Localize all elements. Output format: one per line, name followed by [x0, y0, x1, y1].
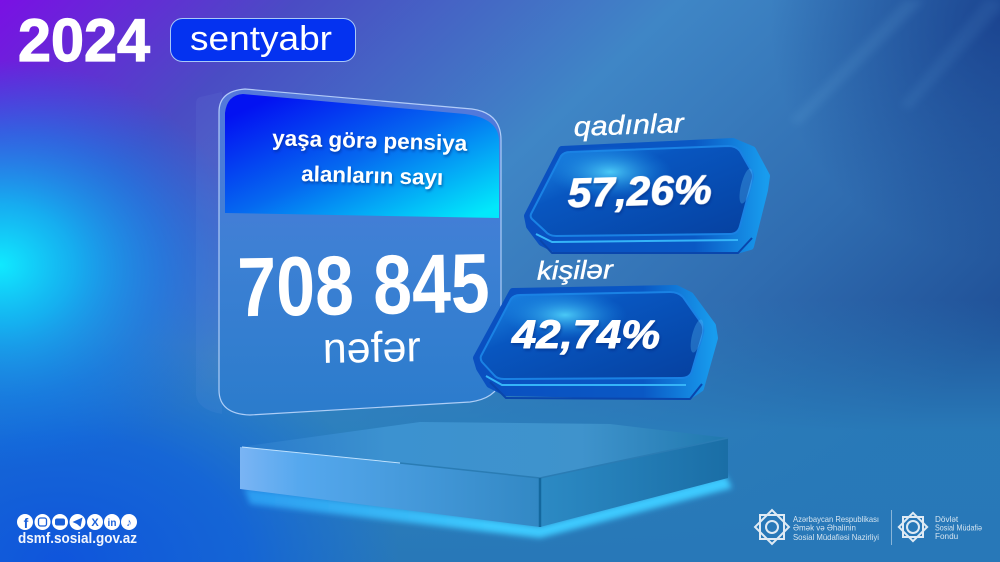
ministry name: Əmək və Əhalinin [793, 524, 856, 532]
header text [272, 125, 468, 190]
title: year: 2024 [18, 7, 151, 74]
podium top [240, 422, 728, 478]
badge highlight [548, 146, 672, 198]
podium glow [244, 476, 732, 538]
label: women: qadınlar [573, 108, 685, 142]
badge 3D edge [528, 142, 766, 250]
fund name: Fondu [935, 532, 959, 541]
social icons [17, 514, 137, 531]
podium right face [540, 438, 728, 527]
badge bottom rim [490, 382, 702, 399]
social icons: f [24, 515, 29, 531]
badge bottom rim [540, 238, 752, 253]
badge: women [528, 142, 766, 253]
logo: fund [899, 513, 927, 541]
ministry name [793, 515, 879, 542]
badge face [531, 146, 753, 236]
total number: 708 845 [237, 236, 490, 334]
fund name: Dövlət [935, 515, 959, 524]
website: dsmf.sosial.gov.az [18, 531, 137, 547]
percentage value: 57,26% [567, 166, 712, 216]
social icons: ♪ [126, 517, 132, 529]
social icons: in [108, 518, 116, 529]
fund name: Sosial Müdafiə [935, 524, 982, 532]
ministry name: Sosial Müdafiəsi Nazirliyi [793, 533, 879, 542]
month pill [170, 18, 356, 62]
card lower glass body [219, 89, 501, 415]
card outline [219, 89, 501, 415]
ministry name: Azərbaycan Respublikası [793, 515, 879, 524]
percentage value: 42,74% [511, 313, 660, 357]
panel: glass card [196, 89, 501, 415]
month pill: sentyabr [190, 20, 332, 58]
badge rim line [536, 234, 738, 242]
social icons: X [91, 517, 99, 529]
fund name [935, 515, 982, 541]
podium [240, 422, 732, 538]
card ghost edge [196, 92, 222, 414]
podium left face [240, 447, 540, 527]
badge: men [477, 289, 714, 399]
label: men: kişilər [537, 254, 615, 286]
badge rim line [486, 376, 686, 385]
badge right gloss [737, 167, 755, 205]
header text: yaşa görə pensiya [272, 125, 468, 156]
header text: alanların sayı [301, 161, 444, 190]
logo: ministry [755, 510, 789, 544]
logo divider [891, 510, 892, 545]
badge right gloss [688, 318, 706, 354]
badge highlight [503, 291, 627, 339]
badge face [481, 292, 703, 379]
card header band [225, 94, 499, 218]
badge 3D edge [477, 289, 714, 396]
unit label: nəfər [322, 323, 421, 373]
